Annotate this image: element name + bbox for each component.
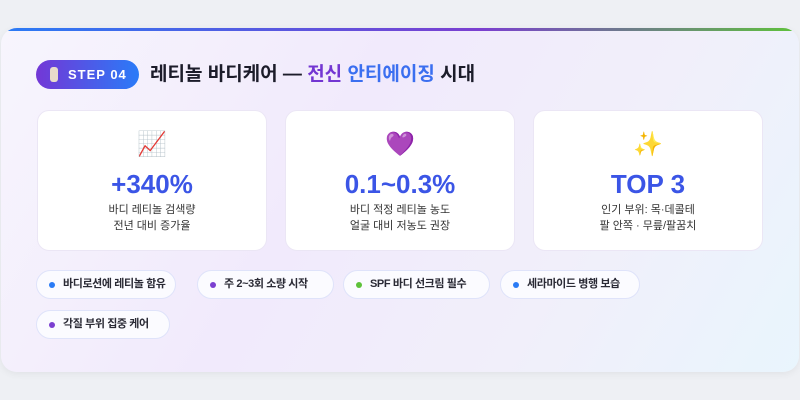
stat card 2: 0.1~0.3% [345,169,455,199]
tip pill 3 [343,270,490,299]
title: 레티놀 바디케어 — 전신 안티에이징 시대 [150,64,475,85]
step badge [36,60,139,89]
tip pill 5: 각질 부위 집중 케어 [63,318,149,330]
icon: heart: 💜 [385,131,415,158]
stat card 2: 바디 적정 레티놀 농도 [350,204,450,216]
tip pill 4 [500,270,640,299]
stat card 3: 인기 부위: 목·데콜테 [601,204,695,216]
icon: chart: 📈 [137,131,167,158]
stat card 2: 얼굴 대비 저농도 권장 [350,220,450,232]
tip pill 1: 바디로션에 레티놀 함유 [63,278,166,290]
stat card 2 [285,110,515,251]
stat card 1: 전년 대비 증가율 [114,220,190,232]
stat card 3: 팔 안쪽 · 무릎/팔꿈치 [600,220,696,232]
tip pill 2: 주 2~3회 소량 시작 [224,278,308,290]
stat card 1 [37,110,267,251]
tip pill 5 [36,310,170,339]
tip pill 4: 세라마이드 병행 보습 [527,278,620,290]
tip pill 2 [197,270,334,299]
tip pill 3: SPF 바디 선크림 필수 [370,278,466,290]
icon: sparkles: ✨ [633,131,663,158]
stat card 1: 바디 레티놀 검색량 [108,204,196,216]
stat card 3 [533,110,763,251]
tip pill 1 [36,270,176,299]
stat card 3: TOP 3 [611,169,685,199]
step badge: STEP 04 [68,67,127,82]
stat card 1: +340% [111,169,193,199]
